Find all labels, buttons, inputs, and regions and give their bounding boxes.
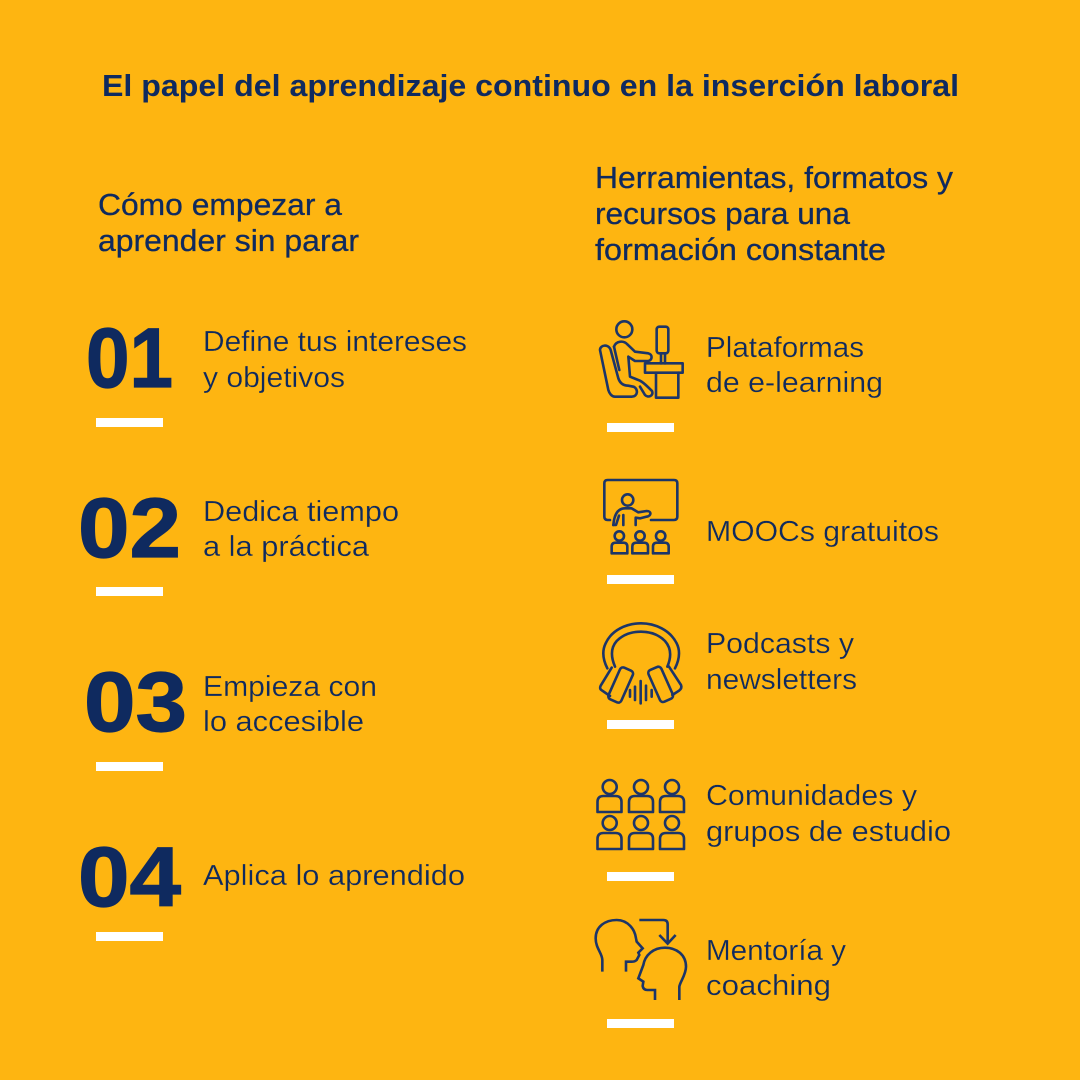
resource: podcasts: Podcasts y	[706, 628, 855, 660]
panel: cómo empezar	[78, 187, 467, 941]
step 01	[86, 311, 467, 427]
icon: group of six people	[598, 780, 684, 849]
step 03: Empieza con	[203, 671, 377, 703]
step 01: y objetivos	[203, 362, 345, 394]
resource: plataformas de e-learning: Plataformas	[706, 332, 864, 364]
step 02: Dedica tiempo	[203, 496, 399, 528]
resource: podcasts: newsletters	[706, 664, 857, 696]
heading: cómo empezar: Cómo empezar a	[98, 187, 343, 222]
heading: herramientas: recursos para una	[595, 196, 851, 231]
step 03	[84, 655, 377, 771]
step 02: 02	[78, 481, 181, 575]
step 03: 03	[84, 655, 187, 749]
step 03: lo accesible	[203, 706, 364, 738]
resource: moocs: MOOCs gratuitos	[706, 516, 939, 548]
step 01: 01	[86, 311, 173, 405]
heading: cómo empezar	[98, 187, 359, 258]
panel: herramientas	[595, 160, 954, 1028]
icon: person at computer	[600, 321, 683, 398]
resource: moocs	[604, 480, 939, 584]
resource: comunidades: Comunidades y	[706, 780, 918, 812]
icon: headphones with sound wave	[600, 623, 681, 704]
resource: plataformas de e-learning: de e-learning	[706, 367, 883, 399]
step 04	[78, 830, 465, 941]
resource: mentoría: Mentoría y	[706, 935, 847, 967]
heading: herramientas: formación constante	[595, 232, 886, 267]
resource: plataformas de e-learning	[600, 321, 883, 432]
resource: mentoría	[596, 920, 847, 1028]
resource: comunidades: grupos de estudio	[706, 816, 951, 848]
step 04: 04	[78, 830, 181, 924]
step 02: a la práctica	[203, 531, 370, 563]
resource: mentoría: coaching	[706, 970, 831, 1002]
resource: podcasts	[600, 623, 857, 729]
heading: cómo empezar: aprender sin parar	[98, 223, 359, 258]
heading: herramientas: Herramientas, formatos y	[595, 160, 954, 195]
step 01: Define tus intereses	[203, 326, 467, 358]
title: El papel del aprendizaje continuo en la inserción laboral	[102, 68, 959, 103]
step 04: Aplica lo aprendido	[203, 860, 465, 892]
step 02	[78, 481, 399, 596]
heading: herramientas	[595, 160, 954, 267]
icon: teacher at board with students	[604, 480, 677, 553]
resource: comunidades	[598, 780, 951, 881]
icon: two heads with arrow	[596, 920, 686, 1000]
